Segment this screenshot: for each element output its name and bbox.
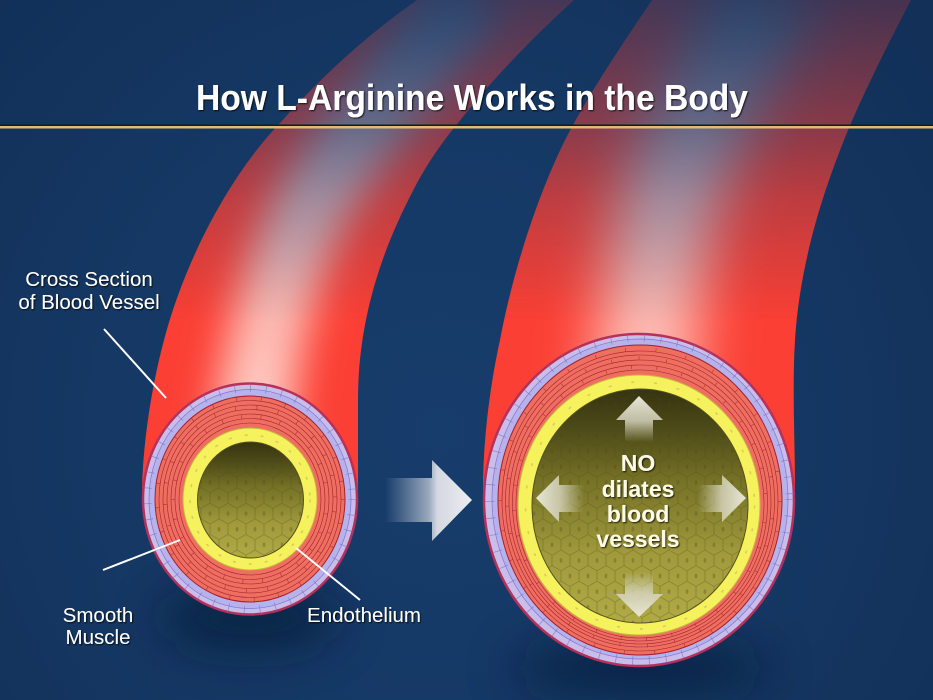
endothelium cell marks bbox=[526, 382, 754, 629]
label: endothelium bbox=[296, 548, 421, 627]
center text: NO dilates blood vessels: vessels bbox=[596, 526, 680, 552]
tube: small vessel body bbox=[142, 0, 574, 490]
dilation arrow: down bbox=[616, 572, 663, 617]
lumen bbox=[532, 389, 748, 623]
label: smooth muscle bbox=[63, 540, 180, 649]
adventitia cells bbox=[490, 337, 790, 661]
dilation arrow: up bbox=[616, 396, 663, 442]
label: smooth muscle: Muscle bbox=[66, 626, 130, 649]
outer wall bbox=[143, 384, 357, 614]
cross section: large vessel bbox=[484, 334, 794, 666]
adventitia cells bbox=[147, 388, 353, 610]
label: endothelium: Endothelium bbox=[307, 604, 421, 627]
smooth muscle layer bbox=[155, 396, 345, 602]
dilation arrow: left bbox=[536, 475, 584, 522]
lumen bbox=[198, 442, 304, 558]
label: cross section of blood vessel bbox=[18, 268, 166, 398]
label: cross section of blood vessel: of Blood Vessel bbox=[18, 291, 160, 314]
center text: NO dilates blood vessels bbox=[596, 450, 680, 552]
endothelium ring bbox=[183, 428, 317, 570]
endothelium ring bbox=[518, 375, 760, 635]
center text: NO dilates blood vessels: NO bbox=[621, 450, 655, 476]
drop shadow under vessels bbox=[160, 584, 770, 694]
outer wall bbox=[484, 334, 794, 666]
label: smooth muscle: Smooth bbox=[63, 604, 133, 627]
smooth muscle layer bbox=[498, 345, 782, 655]
title: How L-Arginine Works in the Body bbox=[196, 77, 748, 118]
center text: NO dilates blood vessels: blood bbox=[607, 501, 669, 527]
cross section: small vessel bbox=[143, 384, 357, 614]
arrow: small to large vessel bbox=[385, 460, 472, 541]
center text: NO dilates blood vessels: dilates bbox=[602, 476, 674, 502]
endothelium cell marks bbox=[190, 435, 310, 564]
dilation arrow: right bbox=[698, 475, 746, 522]
tube: large vessel body bbox=[483, 0, 911, 490]
title rule bbox=[0, 124, 933, 128]
label: cross section of blood vessel: Cross Section bbox=[25, 268, 153, 291]
